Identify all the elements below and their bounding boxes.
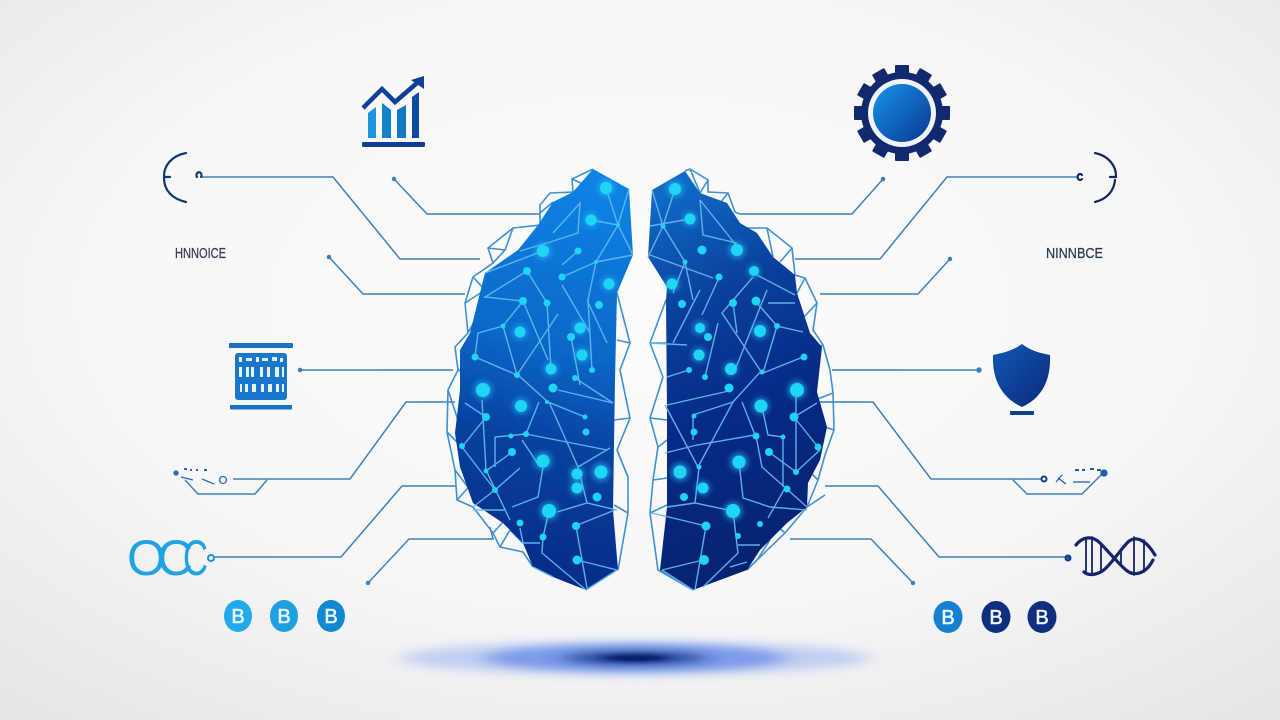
right hemisphere wire cage: [650, 169, 834, 590]
icon: left OCC mark: C: [183, 530, 208, 586]
brain: left hemisphere: [447, 169, 633, 590]
right hemisphere body: [648, 171, 827, 590]
brain: right hemisphere: [648, 169, 834, 590]
badges: right row: B: [941, 607, 955, 629]
icon: right small sketch: [1042, 469, 1107, 484]
label: right: NINNBCE: [1046, 245, 1103, 262]
icon: left OCC mark: C: [157, 530, 193, 586]
icon: gear: [854, 65, 950, 161]
label: left: HNNOICE: [175, 245, 226, 262]
connector lines: left: [185, 177, 540, 584]
badges: left row: [224, 600, 345, 632]
left hemisphere nodes: [474, 180, 616, 520]
icon: DNA helix: [1066, 537, 1155, 575]
left hemisphere network lines: [462, 188, 633, 590]
badges: right row: [934, 601, 1056, 633]
ground shadow: [400, 641, 870, 675]
icon: left OCC mark: [127, 530, 214, 586]
icon: right shield: [993, 344, 1050, 415]
left hemisphere wire cage: [447, 169, 630, 570]
left hemisphere body: [455, 169, 633, 590]
right hemisphere network lines: [648, 189, 820, 590]
icon: server / data block: [229, 343, 293, 410]
connector lines: right: [740, 177, 1103, 584]
right hemisphere nodes: [665, 181, 806, 520]
badges: left row: B: [324, 606, 338, 628]
icon: left bracket: [164, 153, 202, 202]
icon: left small sketch: [174, 469, 226, 484]
icon: left OCC mark: O: [127, 530, 166, 586]
icon: right bracket: [1078, 153, 1116, 202]
badges: right row: B: [1035, 607, 1049, 629]
badges: right row: B: [989, 607, 1003, 629]
badges: left row: B: [277, 606, 291, 628]
badges: left row: B: [231, 606, 245, 628]
icon: bar chart with arrow: [362, 76, 425, 147]
